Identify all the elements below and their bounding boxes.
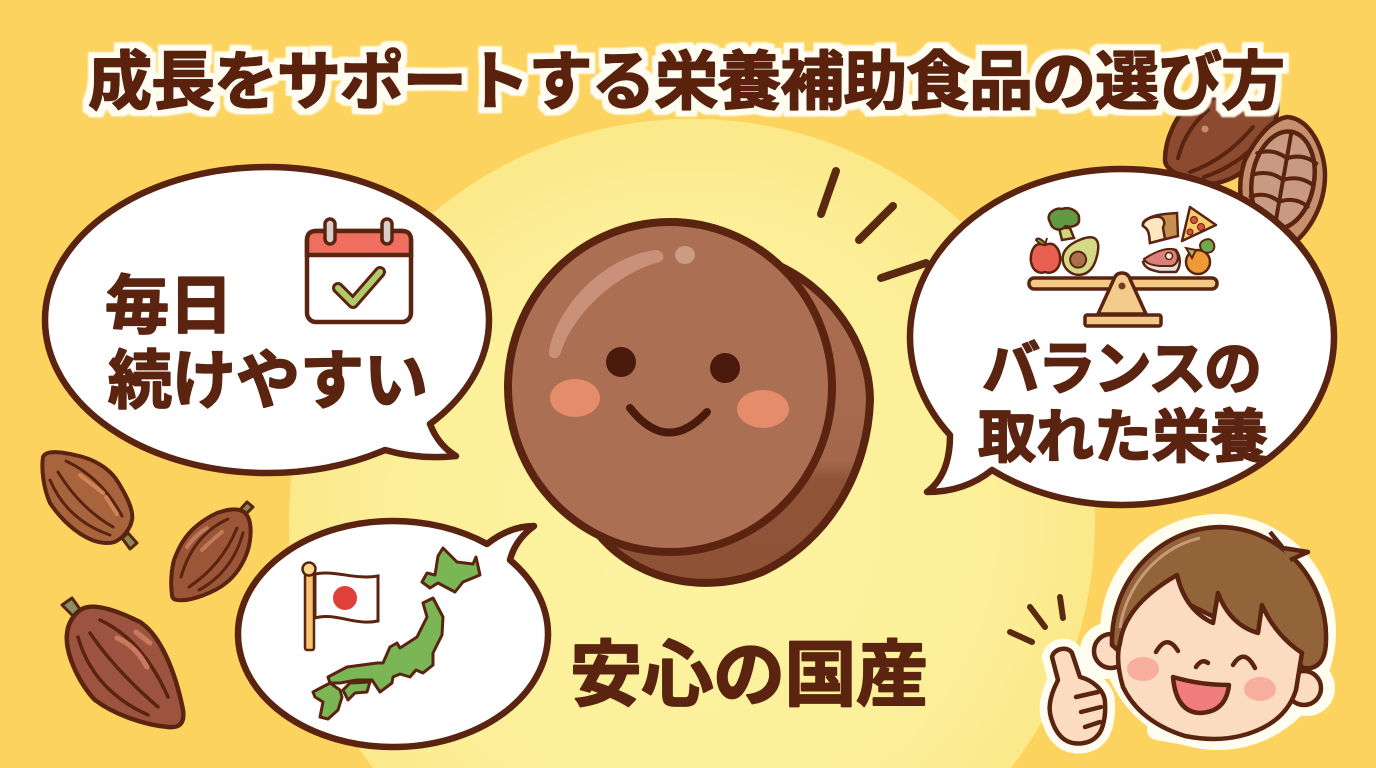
mouth <box>1173 677 1229 713</box>
speech bubble: easy to continue <box>45 167 489 473</box>
hair <box>1112 527 1326 668</box>
ears <box>1094 634 1128 668</box>
food: orange and greens <box>1186 239 1214 274</box>
cheer lines <box>1010 597 1063 642</box>
label: 毎日続けやすい: 続けやすい <box>108 345 428 417</box>
speech bubble: made in Japan <box>238 521 548 747</box>
title: 成長をサポートする栄養補助食品の選び方 <box>88 46 1285 118</box>
food: avocado <box>1056 229 1108 281</box>
background glow circle <box>289 119 1095 768</box>
label: バランスの取れた栄養: 取れた栄養 <box>978 405 1268 470</box>
food: meat <box>1143 249 1180 272</box>
cocoa pod: large bottom <box>62 598 183 727</box>
label: バランスの取れた栄養: バランスの <box>982 337 1262 402</box>
character: boy with thumbs up <box>1010 524 1326 743</box>
cocoa pod: top right open <box>1240 117 1325 244</box>
icon: balance scale with foods <box>1029 207 1217 326</box>
label: 毎日続けやすい: 毎日 <box>105 270 233 342</box>
thumbs-up hand <box>1050 649 1105 743</box>
cocoa pod: top left <box>42 452 137 549</box>
icon: calendar with check <box>307 219 411 322</box>
face <box>1118 575 1302 739</box>
cheeks <box>1127 657 1159 681</box>
speech bubble: balanced nutrition <box>910 169 1334 505</box>
food: broccoli <box>1049 208 1079 240</box>
label: 毎日続けやすい <box>105 270 428 417</box>
label: 安心の国産: 安心の国産 <box>570 636 928 716</box>
label: バランスの取れた栄養 <box>978 337 1268 470</box>
food: bread <box>1143 213 1178 243</box>
icon: Japanese flag <box>302 562 378 650</box>
cocoa pod: middle <box>171 502 253 600</box>
food: pizza <box>1182 207 1216 241</box>
sticker outline <box>1050 524 1326 743</box>
cocoa pod: top right closed <box>1165 98 1277 184</box>
eyes and nose <box>1156 642 1255 668</box>
icon: map of Japan <box>313 548 480 719</box>
mascot: smiling chocolate ball <box>508 222 870 583</box>
sparkle lines by mascot <box>821 171 926 278</box>
food: apple <box>1031 238 1060 273</box>
